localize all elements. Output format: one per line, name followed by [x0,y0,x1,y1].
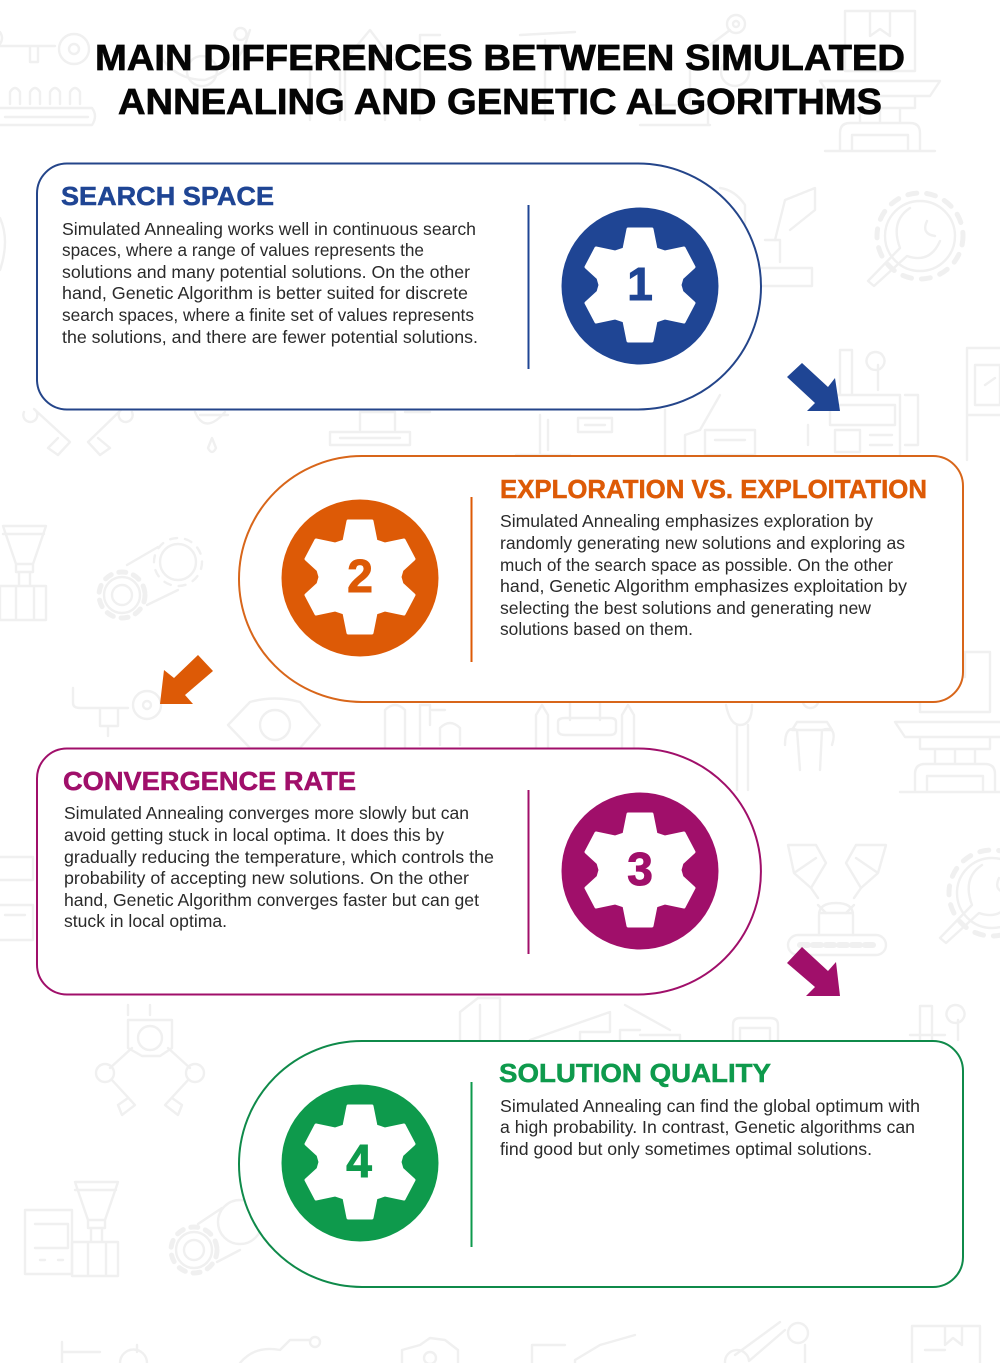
heading: exploration vs. exploitation: EXPLORATION VS. EXPLOITATION [500,474,927,504]
panel: convergence rate [37,748,761,994]
divider [528,205,530,369]
heading: convergence rate: CONVERGENCE RATE [63,766,356,796]
text block: exploration vs. exploitation: much of the search space as possible. On the other [500,555,893,575]
text block: solution quality: Simulated Annealing can find the global optimum with [500,1096,920,1116]
panel outline [239,1041,963,1287]
heading: search space: SEARCH SPACE [61,181,274,211]
text block: search space: hand, Genetic Algorithm is better suited for discrete [62,283,468,303]
text block: convergence rate: probability of accepting new solutions. On the other [64,868,469,888]
icon: gear number 2 [282,500,438,656]
text block: solution quality [500,1096,920,1159]
icon: gear number 1: 1 [627,258,653,310]
title [95,37,905,122]
text block: convergence rate: gradually reducing the temperature, which controls the [64,847,494,867]
text block: exploration vs. exploitation: selecting the best solutions and generating new [500,598,871,618]
text block: search space: solutions and many potential solutions. On the other [62,262,470,282]
panel outline [239,456,963,702]
panel: search space [37,164,761,410]
text block: search space [62,219,478,347]
text block: convergence rate: stuck in local optima. [64,911,227,931]
title: ANNEALING AND GENETIC ALGORITHMS [118,81,882,122]
text block: solution quality: a high probability. In contrast, Genetic algorithms can [500,1117,915,1137]
divider [470,1082,472,1247]
title: MAIN DIFFERENCES BETWEEN SIMULATED [95,37,905,78]
panel: solution quality [239,1041,963,1287]
divider [528,790,530,954]
text block: exploration vs. exploitation: hand, Genetic Algorithm emphasizes exploitation by [500,576,907,596]
icon: gear number 3: 3 [627,843,653,895]
icon: gear number 1 [562,208,718,364]
text block: convergence rate [64,803,494,931]
arrow: panel 1 to panel 2 [787,363,840,411]
icon: gear number 4: 4 [346,1135,372,1187]
icon: gear number 3 [562,792,718,950]
text block: solution quality: find good but only sometimes optimal solutions. [500,1139,872,1159]
text block: convergence rate: Simulated Annealing converges more slowly but can [64,803,469,823]
text block: search space: Simulated Annealing works well in continuous search [62,219,476,239]
text block: convergence rate: hand, Genetic Algorithm converges faster but can get [64,890,479,910]
text block: exploration vs. exploitation: randomly generating new solutions and exploring as [500,533,905,553]
text block: exploration vs. exploitation: Simulated Annealing emphasizes exploration by [500,511,873,531]
panel outline [37,164,761,410]
text block: convergence rate: avoid getting stuck in local optima. It does this by [64,825,444,845]
panel outline [37,748,761,994]
panel: exploration vs. exploitation [239,456,963,702]
text block: search space: the solutions, and there are fewer potential solutions. [62,327,478,347]
text block: exploration vs. exploitation: solutions based on them. [500,619,693,639]
icon: gear number 4 [282,1084,438,1242]
text block: search space: spaces, where a range of values represents the [62,240,424,260]
arrow: panel 2 to panel 3 [160,655,213,704]
divider [470,497,472,662]
text block: search space: search spaces, where a finite set of values represents [62,305,474,325]
text block: exploration vs. exploitation [500,511,907,639]
icon: gear number 2: 2 [347,550,373,602]
arrow: panel 3 to panel 4 [787,947,840,996]
heading: solution quality: SOLUTION QUALITY [499,1058,771,1088]
